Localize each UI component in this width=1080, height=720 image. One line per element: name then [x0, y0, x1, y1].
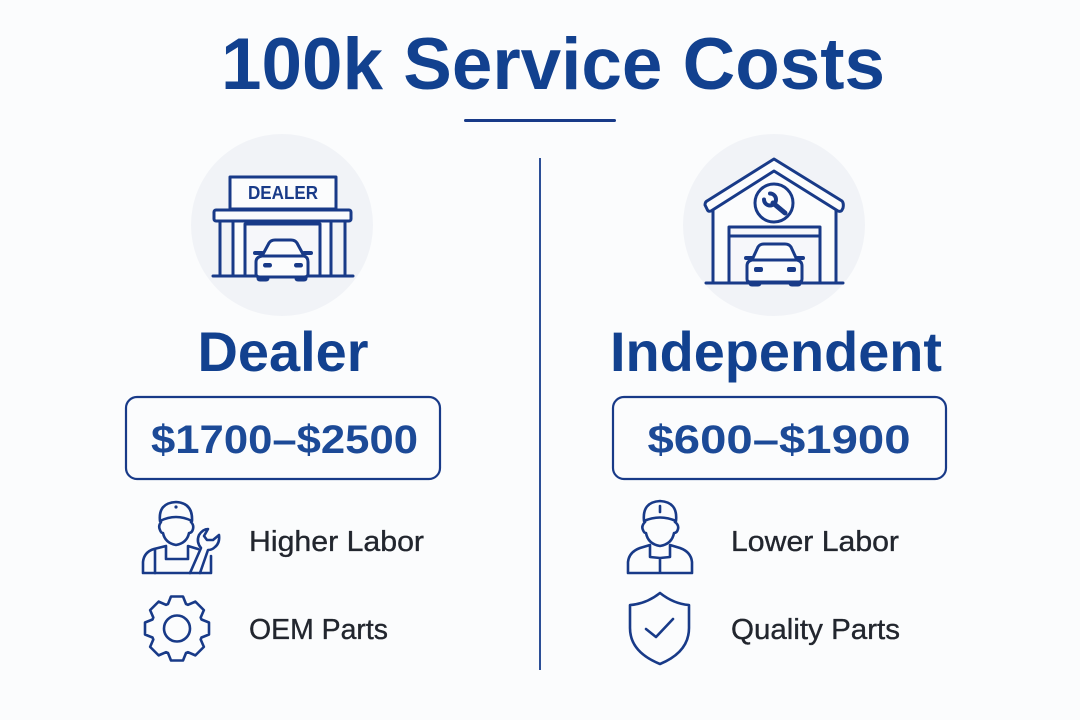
icon: shield check [630, 593, 689, 664]
icon: dealership [191, 134, 373, 316]
label: quality parts: Quality Parts [731, 614, 900, 646]
center divider [539, 158, 541, 670]
heading: dealer: Dealer [198, 320, 368, 383]
icon: mechanic with wrench [143, 502, 219, 573]
icon: wrench badge [755, 184, 793, 222]
price box: dealer: $1700–$2500 [151, 418, 418, 462]
icon: car [255, 240, 311, 280]
icon: independent garage [683, 134, 865, 316]
icon: mechanic [628, 501, 692, 573]
heading: independent: Independent [610, 320, 942, 383]
label: higher labor: Higher Labor [249, 526, 425, 558]
panel: dealer [126, 134, 440, 660]
panel: independent [610, 134, 946, 664]
label: oem parts: OEM Parts [249, 614, 388, 646]
title underline [464, 119, 616, 122]
icon: gear [145, 596, 209, 660]
icon: dealership: DEALER [248, 183, 318, 203]
title: 100k Service Costs [221, 24, 885, 105]
label: lower labor: Lower Labor [731, 526, 900, 558]
icon: car [746, 244, 803, 285]
price box: independent [613, 397, 946, 479]
price box: dealer [126, 397, 440, 479]
price box: independent: $600–$1900 [648, 418, 910, 462]
